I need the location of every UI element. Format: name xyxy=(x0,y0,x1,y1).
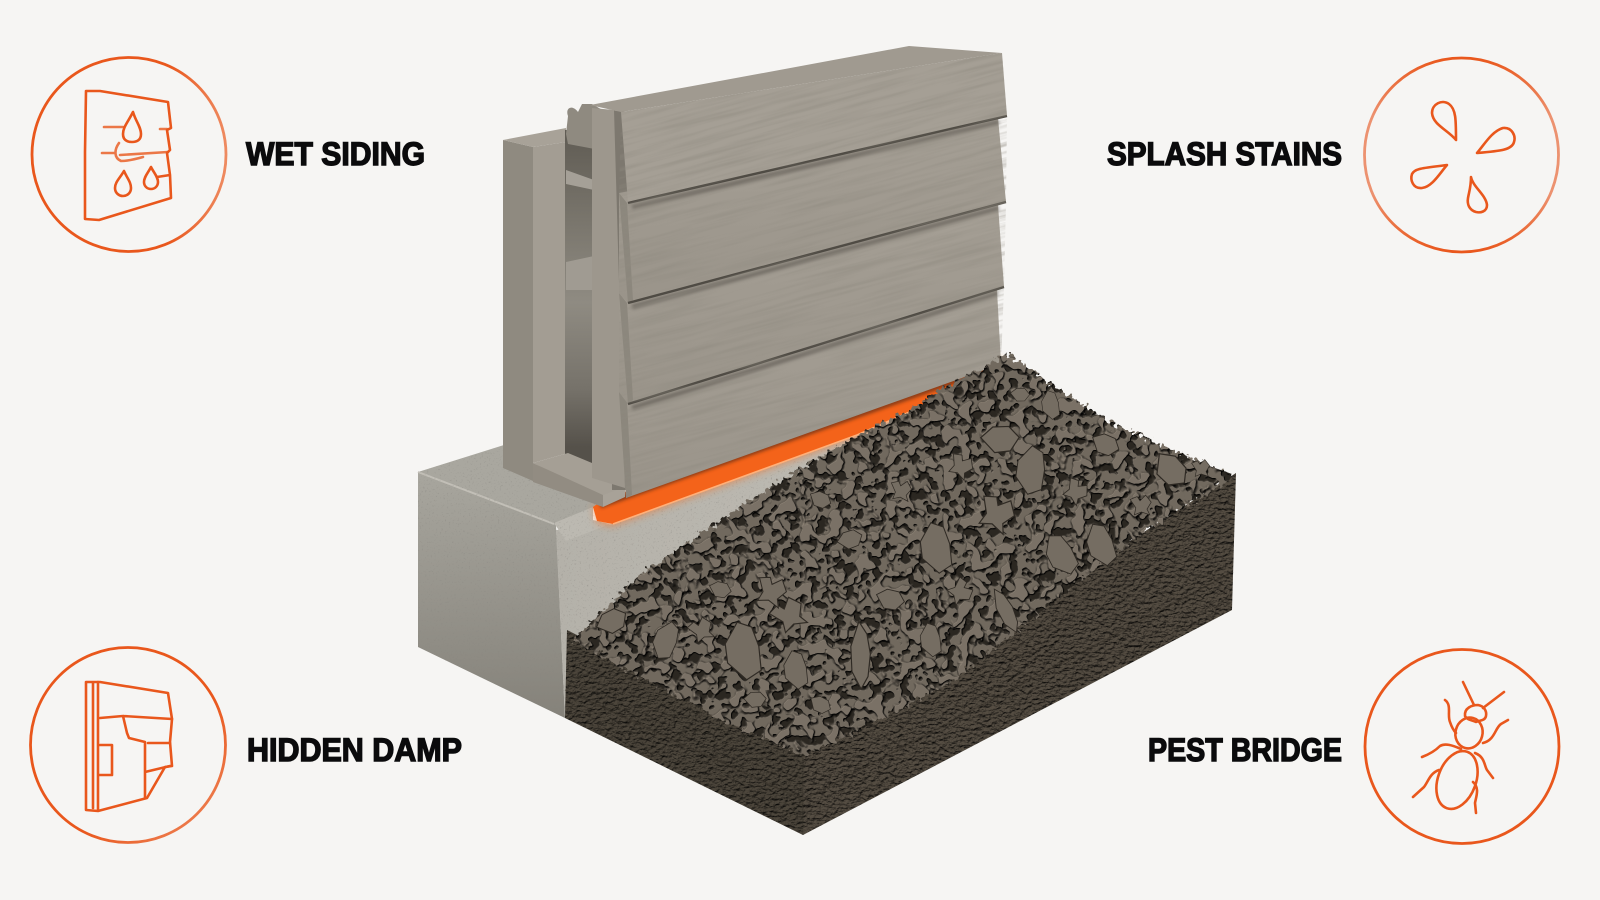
soil block xyxy=(565,473,1236,835)
icon: wet siding xyxy=(32,58,226,252)
siding boards xyxy=(619,53,1008,498)
mulch layer xyxy=(572,353,1234,756)
wall cavity xyxy=(565,130,595,475)
label: wet siding: WET SIDING xyxy=(246,136,425,172)
label: pest bridge: PEST BRIDGE xyxy=(1148,732,1342,768)
siding top surface xyxy=(590,46,1002,112)
icon: splash droplets xyxy=(1364,58,1558,252)
larger mulch flakes xyxy=(593,386,1210,715)
trim post and profile xyxy=(566,104,636,490)
label: hidden damp: HIDDEN DAMP xyxy=(247,732,462,768)
panel: splash stains xyxy=(1107,58,1558,252)
siding wall assembly xyxy=(503,46,1008,507)
panel: hidden damp xyxy=(30,648,462,842)
illustration: wall section with mulch bed xyxy=(418,46,1236,835)
icon: hidden damp xyxy=(30,648,226,842)
panel: wet siding xyxy=(32,58,425,252)
label: splash stains: SPLASH STAINS xyxy=(1107,136,1342,172)
concrete foundation xyxy=(418,422,889,718)
left stud column xyxy=(503,128,568,481)
bottom sill plate xyxy=(533,453,625,507)
panel: pest bridge xyxy=(1148,650,1559,844)
orange gap glow line xyxy=(593,358,1004,526)
icon: pest insect xyxy=(1365,650,1559,844)
